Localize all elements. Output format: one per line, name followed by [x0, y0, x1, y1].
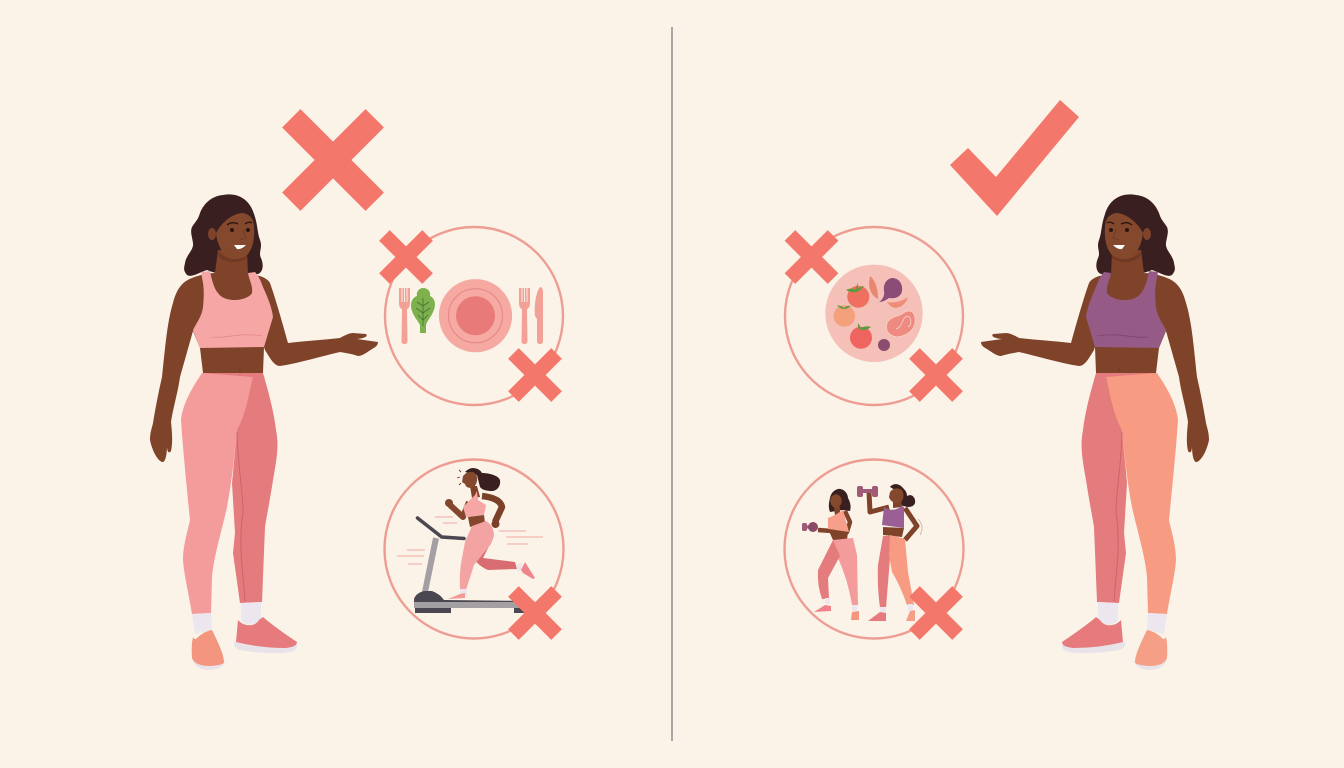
icon: cross at bottom of treadmill circle — [508, 586, 562, 640]
figure: woman in pink workout set — [150, 194, 378, 670]
circle: plate of fruit and protein — [785, 227, 963, 405]
icon: large check mark — [950, 100, 1079, 216]
icon: cross at bottom of plate circle — [508, 348, 562, 402]
circle: woman running on treadmill — [384, 460, 564, 638]
icon: dinner plate — [439, 279, 512, 352]
icon: cross at bottom of dumbbell circle — [909, 586, 963, 640]
figure: woman in purple top and peach leggings — [981, 194, 1209, 670]
icon: running woman — [445, 468, 535, 599]
icon: food plate — [825, 265, 923, 362]
panel: right side, better approach — [784, 100, 1209, 670]
icon: cross at top of plate circle — [379, 230, 433, 284]
icon: left fork — [399, 288, 410, 344]
icon: cross at bottom of food circle — [909, 348, 963, 402]
icon: large red cross — [282, 109, 384, 211]
icon: knife — [535, 287, 543, 344]
motion lines — [397, 517, 543, 564]
circle: plate with small meal — [385, 227, 563, 405]
icon: woman with dumbbell, left — [802, 489, 859, 620]
panel: left side, wrong approach — [150, 109, 564, 670]
icon: cross at top of food circle — [785, 230, 838, 284]
circle: two women lifting dumbbells — [784, 460, 964, 638]
icon: woman with dumbbell, right — [857, 484, 922, 621]
icon: treadmill — [414, 518, 535, 613]
icon: right fork — [519, 288, 530, 344]
icon: green leaf — [411, 288, 435, 333]
